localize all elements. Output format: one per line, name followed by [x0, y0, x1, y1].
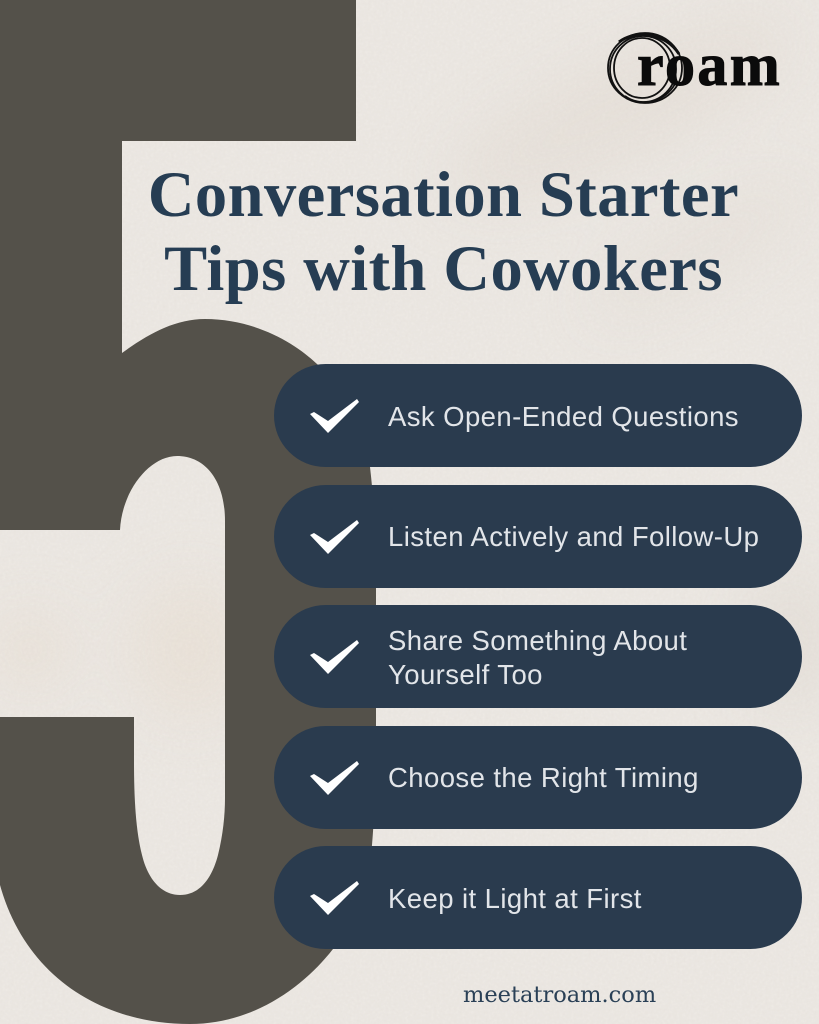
- tip pill 2: [274, 484, 802, 588]
- tip text: Choose the Right Timing: [388, 762, 699, 793]
- tip pill 4: [274, 726, 802, 828]
- tip text: Ask Open-Ended Questions: [388, 400, 739, 432]
- icon: brush circle: [607, 32, 683, 104]
- logo: roam: [607, 32, 782, 104]
- tip pill 1: [274, 364, 802, 467]
- title line 1: Conversation Starter: [148, 159, 739, 230]
- tip pill 5: [274, 846, 802, 949]
- tip text: Listen Actively and Follow-Up: [388, 521, 759, 552]
- logo wordmark: roam: [637, 32, 782, 98]
- website footer: meetatroam.com: [463, 982, 656, 1008]
- tip text: [388, 624, 687, 690]
- icon: check: [310, 640, 359, 674]
- icon: check: [310, 399, 359, 433]
- tip text: Keep it Light at First: [388, 882, 642, 914]
- icon: check: [310, 761, 359, 795]
- tip text: Yourself Too: [388, 658, 543, 690]
- icon: check: [310, 881, 359, 915]
- icon: check: [310, 520, 359, 554]
- tip text: Share Something About: [388, 624, 687, 656]
- tip pill 3: [274, 605, 802, 708]
- title line 2: Tips with Cowokers: [164, 233, 723, 304]
